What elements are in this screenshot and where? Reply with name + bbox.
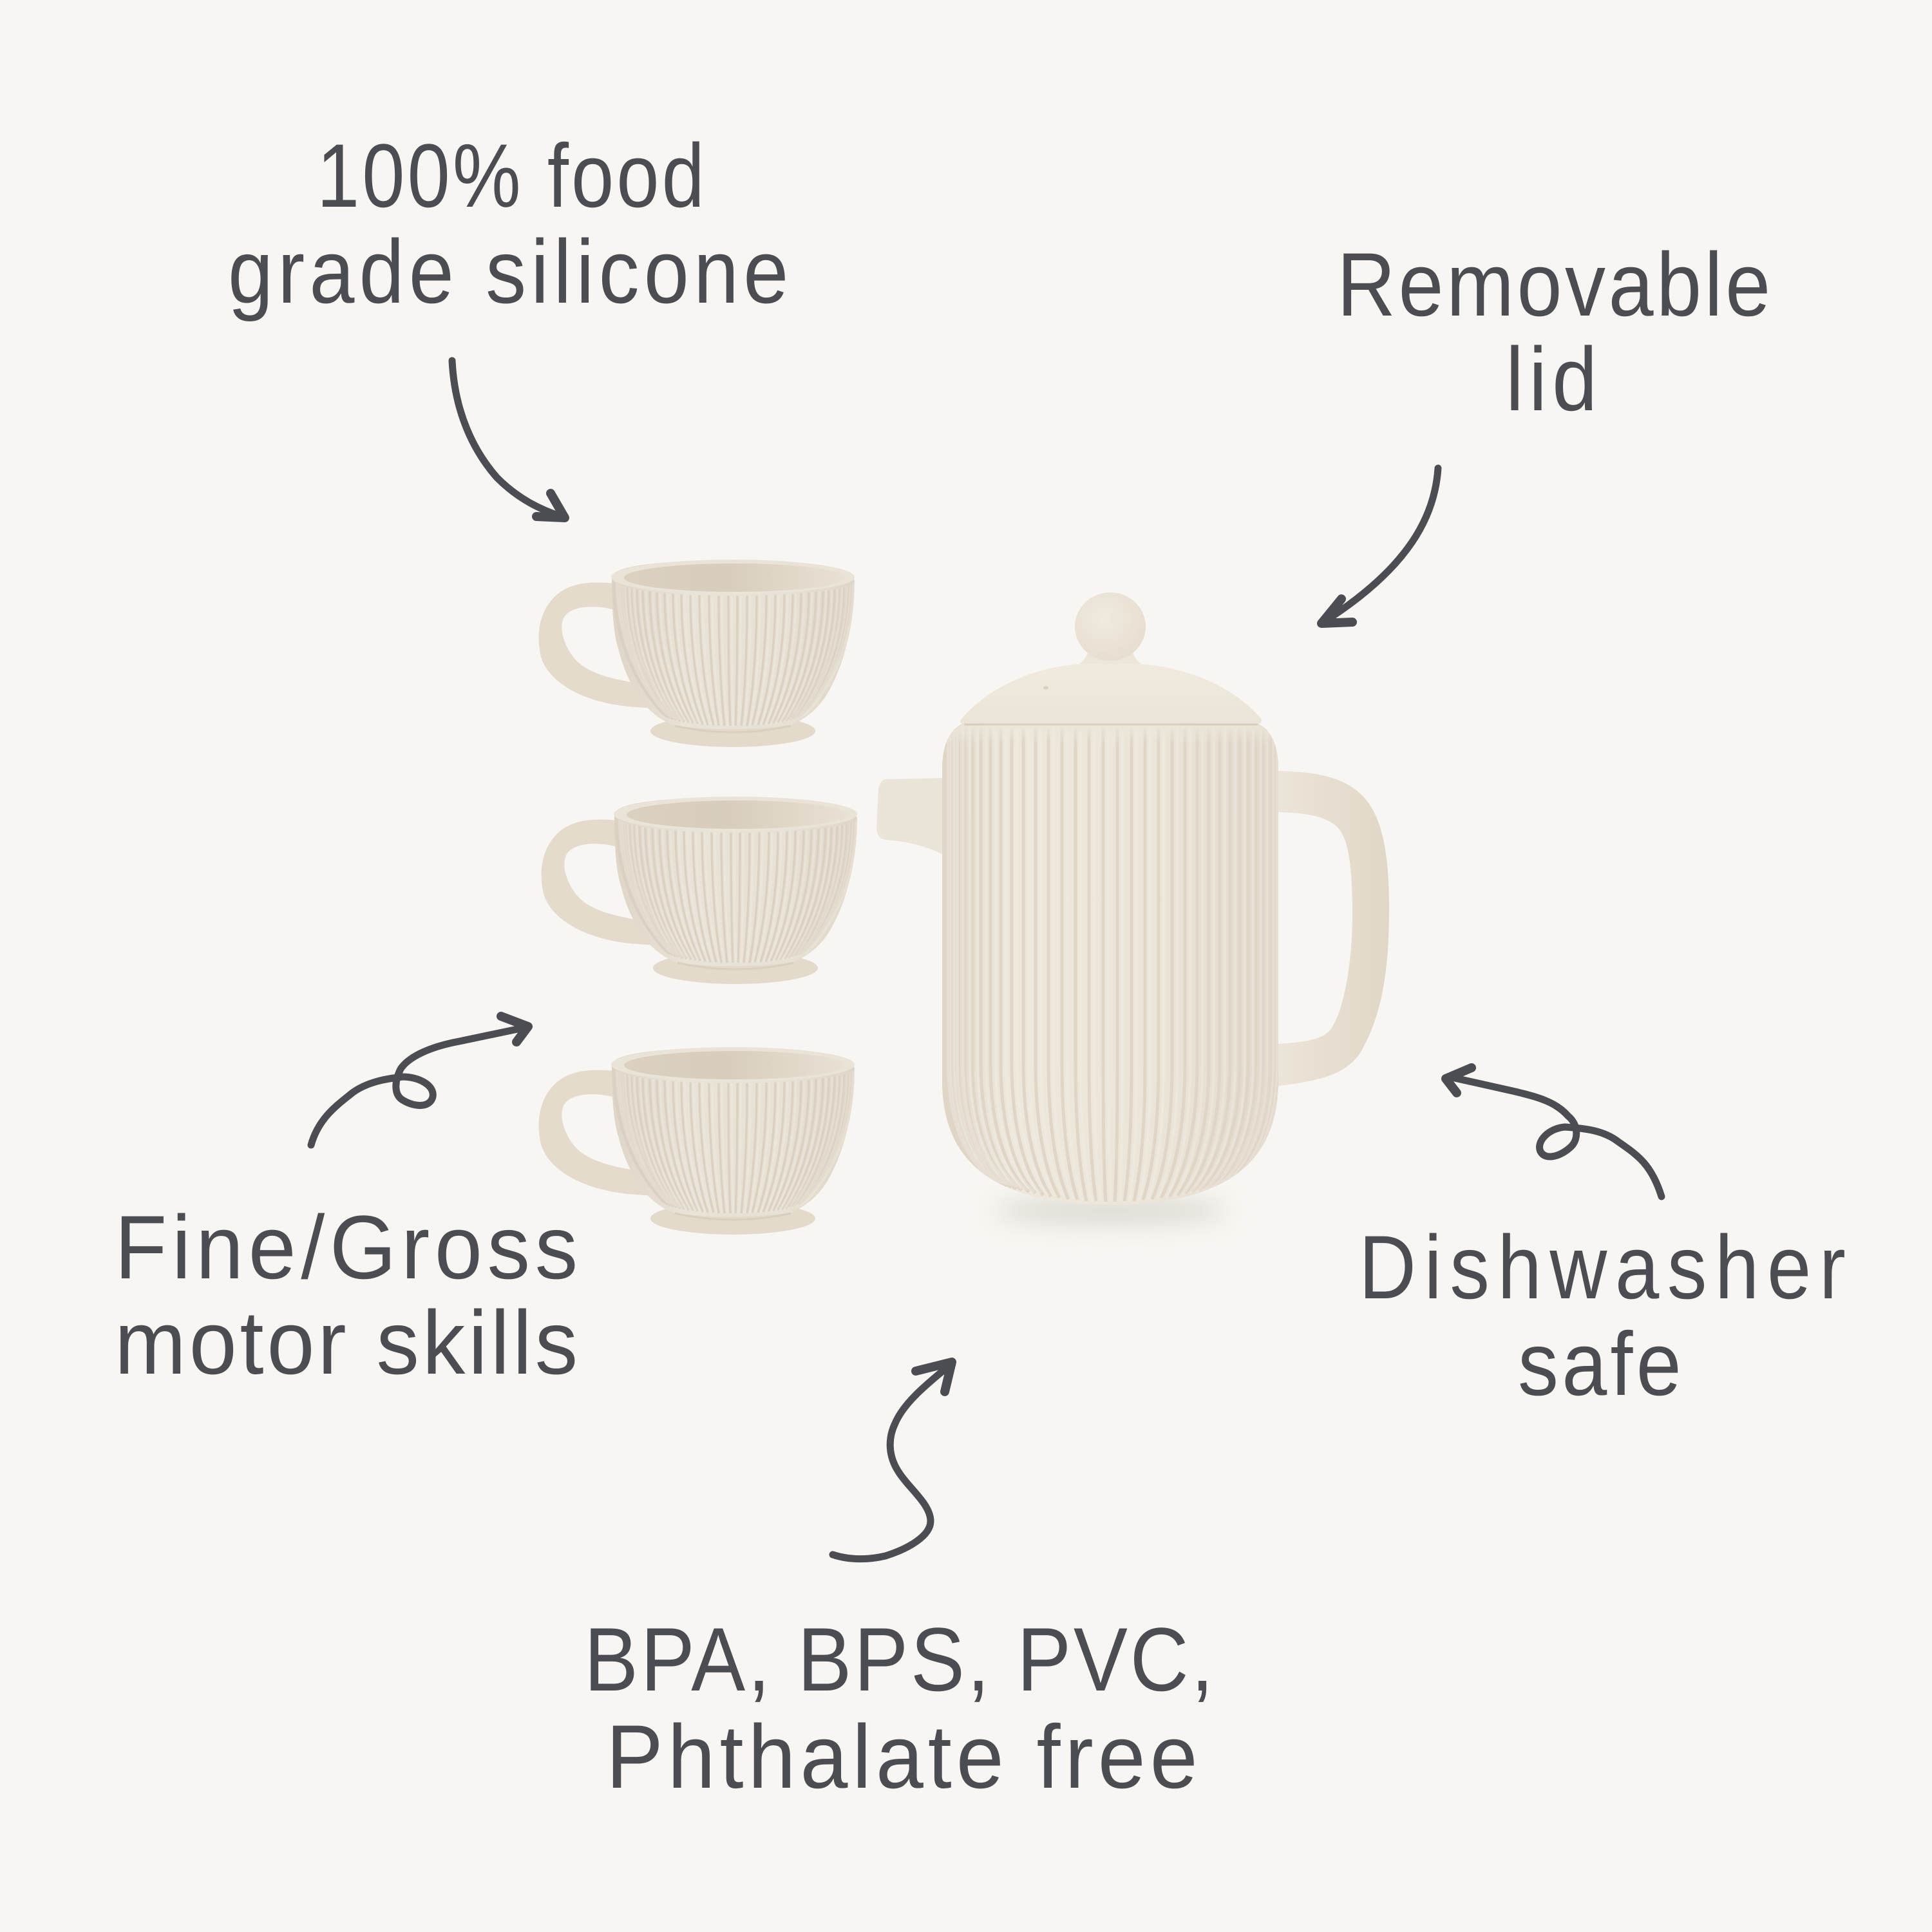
teapot handle xyxy=(1275,771,1389,1086)
cup: middle xyxy=(542,797,858,984)
label: BPA, BPS, PVC, Phthalate free xyxy=(584,1609,1213,1807)
label: Dishwasher safe: Dishwasher xyxy=(1359,1217,1846,1318)
label: BPA, BPS, PVC, Phthalate free: Phthalate free xyxy=(606,1706,1198,1807)
teapot shadow xyxy=(994,1198,1226,1224)
label: Fine/Gross motor skills xyxy=(115,1197,578,1393)
arrow: motor skills label to cup xyxy=(311,1016,528,1145)
label: Dishwasher safe xyxy=(1359,1217,1846,1414)
teapot lid seam xyxy=(964,724,1258,725)
teapot knob xyxy=(1075,592,1146,661)
label: Removable lid xyxy=(1337,234,1770,430)
teapot knob neck xyxy=(1077,647,1144,666)
label: 100% food grade silicone xyxy=(228,125,788,322)
label: BPA, BPS, PVC, Phthalate free: BPA, BPS, PVC, xyxy=(584,1609,1213,1710)
teapot lid xyxy=(960,664,1262,725)
label: Dishwasher safe: safe xyxy=(1518,1314,1681,1414)
teapot spout xyxy=(876,778,947,857)
cup: bottom xyxy=(539,1047,856,1235)
label: 100% food grade silicone: 100% food xyxy=(317,125,705,226)
teapot lid vent xyxy=(1043,687,1048,689)
teapot xyxy=(876,592,1389,1224)
cup: top xyxy=(539,560,856,747)
label: 100% food grade silicone: grade silicone xyxy=(228,222,788,322)
label: Removable lid: Removable xyxy=(1337,234,1770,335)
arrow: dishwasher label to teapot xyxy=(1446,1068,1662,1197)
arrow: silicone label to cup xyxy=(452,361,565,518)
label: Fine/Gross motor skills: motor skills xyxy=(115,1292,578,1393)
teapot body xyxy=(942,723,1278,1205)
arrow: free-from label to teapot xyxy=(833,1362,952,1559)
label: Removable lid: lid xyxy=(1506,329,1597,430)
arrow: removable lid label to lid xyxy=(1321,468,1438,623)
label: Fine/Gross motor skills: Fine/Gross xyxy=(115,1197,578,1298)
teapot ribs xyxy=(940,723,1283,1202)
